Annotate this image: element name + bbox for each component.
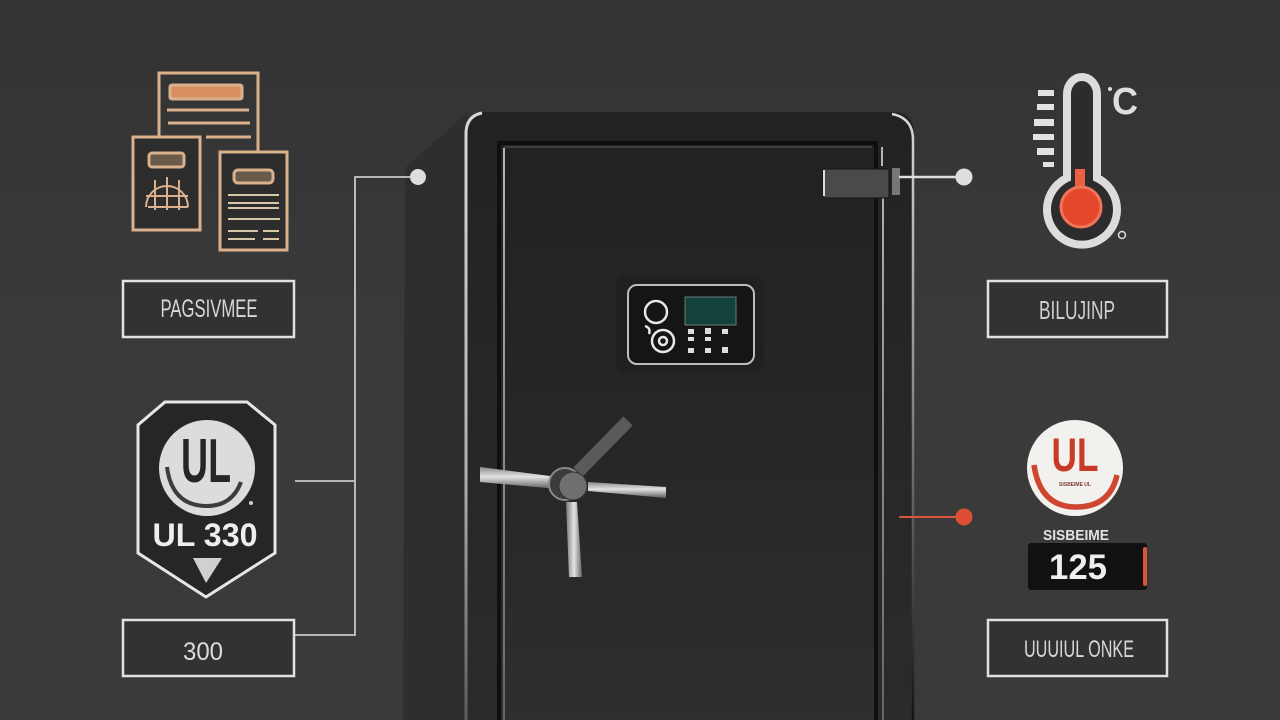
badge: UL 330 <box>138 402 275 597</box>
door top line <box>504 146 872 148</box>
safe <box>403 112 914 720</box>
passport document <box>133 137 200 230</box>
latch <box>823 168 900 198</box>
label: temperature box <box>988 281 1167 337</box>
keypad screen <box>685 297 736 325</box>
safe door <box>500 146 878 720</box>
badge: red UL <box>1027 420 1123 516</box>
label: lower right box: UUUIUL ONKE <box>1024 636 1134 663</box>
safe right edge highlight <box>892 114 913 720</box>
certificate document <box>220 152 287 250</box>
badge title: UL 330 <box>152 517 258 553</box>
badge triangle <box>193 558 222 583</box>
rating readout: 125 <box>1049 548 1107 587</box>
label: passport box: PAGSIVMEE <box>160 295 258 323</box>
handle <box>480 421 666 577</box>
rating readout: SISBEIME <box>1043 527 1109 544</box>
safe body <box>465 112 914 720</box>
label: 300 box <box>123 620 294 676</box>
safe left edge highlight <box>466 113 482 720</box>
UL mark: UL <box>181 427 231 496</box>
keypad <box>616 275 764 373</box>
icon: documents <box>133 73 287 250</box>
connector: lower right <box>899 508 972 526</box>
label: temperature box: BILUJINP <box>1039 295 1115 325</box>
celsius unit: C <box>1112 81 1138 123</box>
rating readout <box>1028 527 1147 590</box>
keypad dials <box>645 301 674 352</box>
back document <box>159 73 258 152</box>
safe side shadow <box>403 112 468 720</box>
label: passport box <box>123 281 294 337</box>
keypad buttons <box>688 328 728 353</box>
door dark seams <box>499 143 876 720</box>
badge: red UL: SISBEIME UL <box>1059 482 1091 488</box>
label: lower right box <box>988 620 1167 676</box>
icon: thermometer <box>1033 77 1138 245</box>
badge: red UL: UL <box>1052 428 1098 481</box>
connector: top right <box>899 168 972 186</box>
temperature ticks <box>1033 90 1054 167</box>
label: 300 box: 300 <box>183 638 223 666</box>
connector: left <box>295 169 426 635</box>
door frame lines <box>504 147 883 720</box>
